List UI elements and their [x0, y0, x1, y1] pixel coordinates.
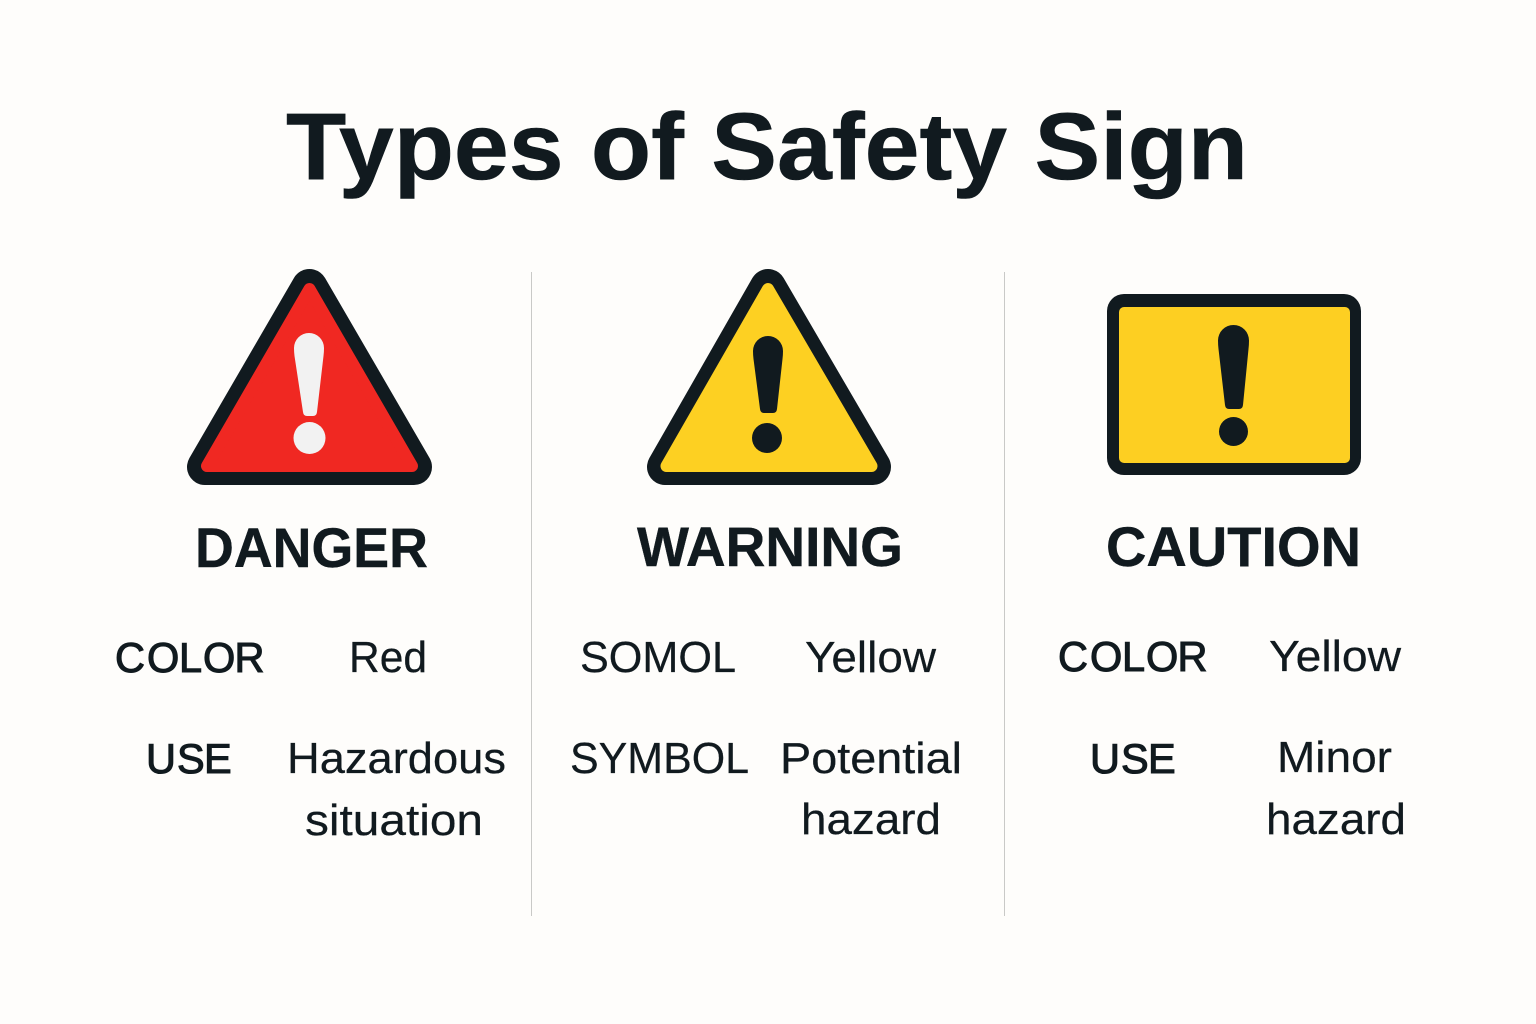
symbol row: SOMOL: [580, 633, 736, 682]
title: Types of Safety Sign: [286, 94, 1248, 200]
symbol row: [580, 633, 936, 682]
color row: Red: [349, 633, 427, 682]
use row: USE: [1090, 735, 1176, 782]
symbol use row: [570, 734, 962, 844]
use row: Minor: [1277, 733, 1392, 782]
panel: danger: [115, 287, 506, 845]
symbol row: Yellow: [805, 633, 936, 682]
color row: [1058, 632, 1401, 681]
panel: warning: [570, 287, 962, 844]
symbol use row: hazard: [801, 795, 941, 844]
symbol use row: SYMBOL: [570, 734, 749, 783]
panel: caution: [1058, 294, 1406, 844]
icon: yellow caution rectangle: [1107, 294, 1361, 475]
symbol use row: Potential: [780, 734, 962, 783]
icon: red danger triangle: [205, 287, 414, 467]
color row: COLOR: [1058, 633, 1207, 680]
color row: [115, 633, 427, 682]
use row: [1090, 733, 1406, 844]
use row: USE: [146, 735, 232, 782]
heading: caution: CAUTION: [1106, 515, 1361, 578]
use row: hazard: [1266, 795, 1406, 844]
use row: [146, 734, 506, 845]
icon: yellow warning triangle: [665, 287, 873, 467]
color row: COLOR: [115, 634, 264, 681]
use row: Hazardous: [287, 734, 506, 783]
color row: Yellow: [1269, 632, 1401, 681]
heading: warning: WARNING: [637, 515, 903, 578]
use row: situation: [305, 796, 483, 845]
heading: danger: DANGER: [195, 516, 428, 579]
